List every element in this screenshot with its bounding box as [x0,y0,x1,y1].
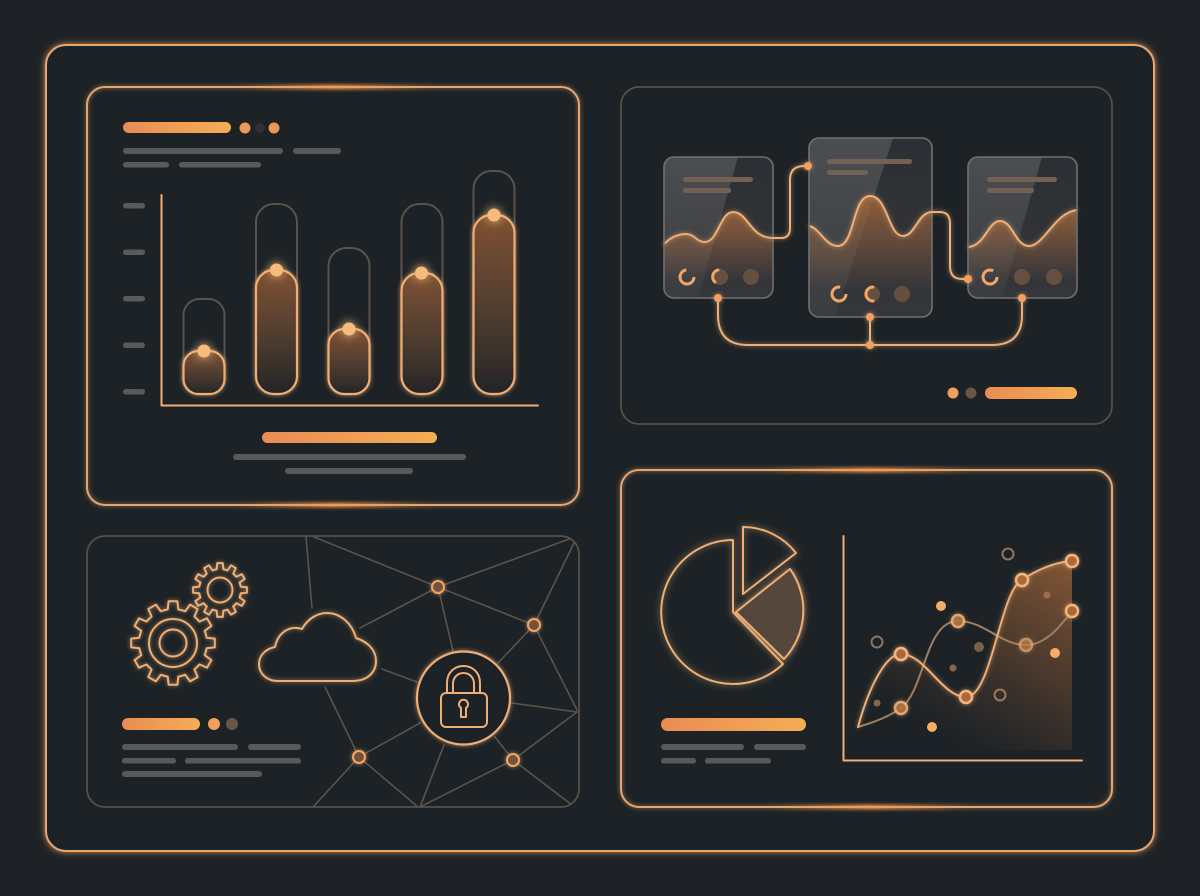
bar 5 [474,171,514,394]
primary line [858,561,1072,727]
top edge flare [240,85,430,89]
connector nodes [714,162,1026,349]
caption placeholder [233,432,466,474]
legend placeholder [948,387,1077,399]
panel border [621,87,1112,424]
chart axes [844,536,1082,760]
scatter points [872,548,1060,732]
pie chart [661,527,803,684]
bottom edge flare [770,805,970,809]
panel: network and security [87,536,579,807]
connector lines [718,166,1022,345]
network nodes [353,581,540,766]
bar 3 [328,248,370,394]
curve nodes [895,555,1078,714]
network lines [306,536,577,807]
glass card centre [809,138,932,317]
glass card right [968,157,1077,298]
icon: small gear [193,563,247,617]
bar 2 [256,204,297,394]
icon: padlock [417,652,510,744]
chart axes [162,195,538,406]
glass card left [664,157,773,298]
panel: glass cards [621,87,1112,424]
bar 4 [402,204,442,394]
area fill [858,561,1072,750]
bottom edge flare [240,503,430,507]
panel border [621,470,1112,807]
y axis ticks [123,203,145,394]
panel: bar chart [87,85,579,507]
icon: cloud [259,613,376,681]
heading placeholder [123,122,280,134]
description lines [123,148,341,168]
panel border [87,87,579,505]
caption placeholder [661,718,806,764]
bar 1 [184,299,224,394]
top edge flare [770,468,970,472]
panel border [87,536,579,807]
icon: large gear [131,601,215,685]
caption placeholder [122,718,301,777]
secondary line [858,611,1072,727]
panel: pie and area chart [621,468,1112,809]
